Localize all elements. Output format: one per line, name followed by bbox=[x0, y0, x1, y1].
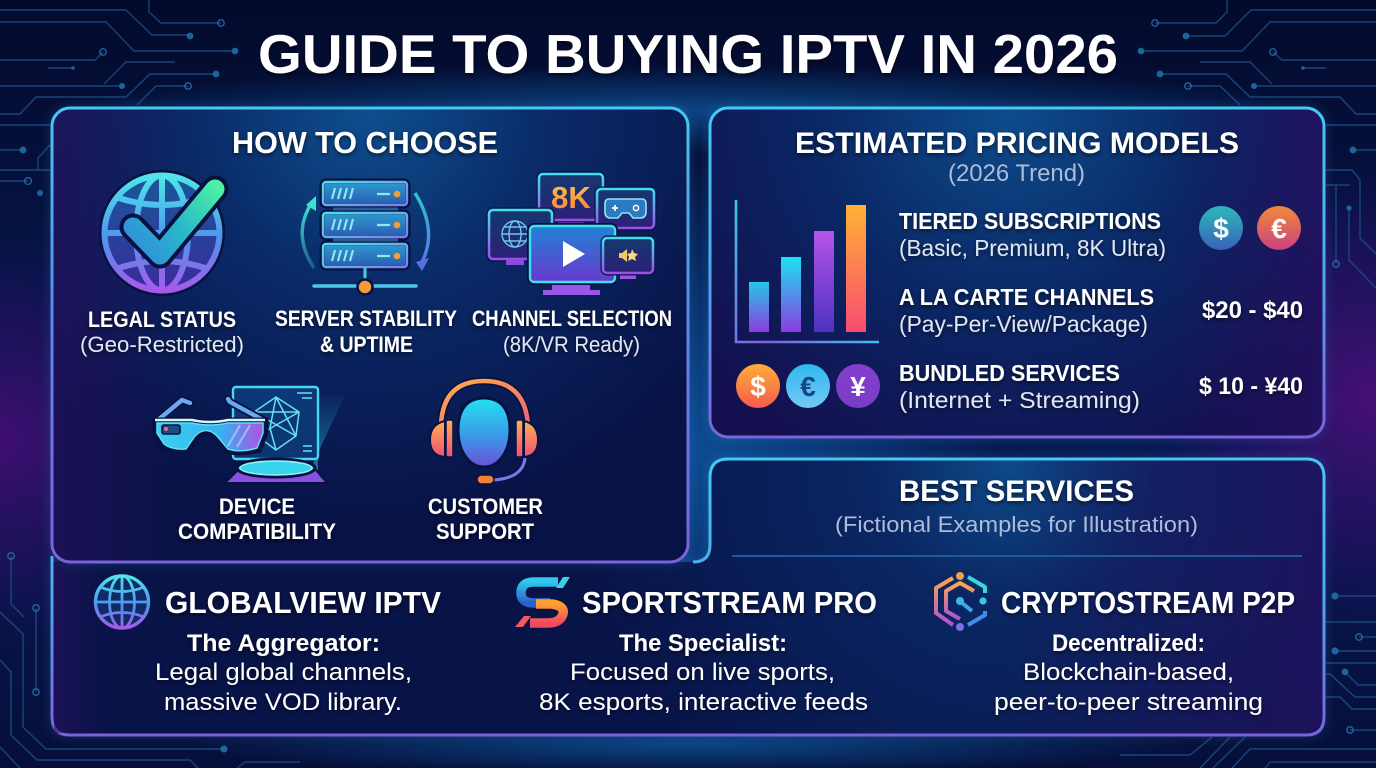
label: SERVER STABILITY bbox=[275, 306, 457, 331]
item: channel selection bbox=[472, 174, 672, 357]
bundled services row bbox=[736, 360, 1303, 413]
icon: cluster of screens: 8K bbox=[551, 180, 591, 215]
a la carte row bbox=[899, 284, 1303, 337]
icon: globe logo bbox=[96, 576, 148, 628]
label: (Geo-Restricted) bbox=[80, 332, 244, 357]
icon: cluster of screens bbox=[489, 174, 654, 295]
pricing frame bbox=[710, 108, 1324, 437]
price: $20 - $40 bbox=[1202, 297, 1303, 324]
divider bbox=[732, 555, 1302, 557]
label: DEVICE bbox=[219, 494, 295, 519]
service description: 8K esports, interactive feeds bbox=[539, 689, 868, 716]
row text: TIERED SUBSCRIPTIONS bbox=[899, 208, 1161, 234]
tiered subscriptions row bbox=[899, 206, 1301, 261]
icon: euro coin bbox=[1257, 206, 1301, 250]
item: customer support bbox=[428, 381, 543, 544]
icon: S logo bbox=[515, 577, 570, 627]
label: CHANNEL SELECTION bbox=[472, 306, 672, 331]
service: globalview iptv bbox=[96, 576, 441, 716]
service description bbox=[994, 630, 1263, 716]
row text: (Pay-Per-View/Package) bbox=[899, 311, 1148, 337]
how to choose heading: HOW TO CHOOSE bbox=[232, 125, 498, 160]
label: & UPTIME bbox=[320, 332, 413, 357]
row text: A LA CARTE CHANNELS bbox=[899, 284, 1154, 310]
best services subheading: (Fictional Examples for Illustration) bbox=[835, 512, 1198, 537]
panel: best services bbox=[52, 459, 1324, 735]
service: sportstream pro bbox=[515, 577, 877, 716]
row text: (Internet + Streaming) bbox=[899, 387, 1140, 413]
item: server stability bbox=[275, 181, 457, 357]
service description: Focused on live sports, bbox=[570, 659, 835, 686]
label: CUSTOMER bbox=[428, 494, 543, 519]
label bbox=[178, 494, 336, 544]
icon: globe with check mark bbox=[102, 173, 222, 293]
service description: Legal global channels, bbox=[155, 659, 412, 686]
service: cryptostream p2p bbox=[936, 572, 1295, 716]
service name: GLOBALVIEW IPTV bbox=[165, 585, 441, 620]
icon: euro coin: € bbox=[1271, 213, 1287, 244]
panel: how to choose bbox=[52, 108, 693, 562]
icon: yen coin bbox=[836, 364, 880, 408]
service description bbox=[155, 630, 412, 716]
label bbox=[472, 306, 672, 357]
how to choose frame bbox=[52, 108, 693, 562]
service description: The Aggregator: bbox=[187, 630, 380, 657]
label bbox=[80, 307, 244, 357]
icon: euro coin bbox=[786, 364, 830, 408]
icon: dollar coin bbox=[1199, 206, 1243, 250]
icon: dollar coin: $ bbox=[1213, 213, 1229, 244]
service description bbox=[539, 630, 868, 716]
icon: dollar coin bbox=[736, 364, 780, 408]
bar chart bbox=[736, 200, 879, 342]
label: LEGAL STATUS bbox=[88, 307, 236, 332]
label bbox=[428, 494, 543, 544]
label: COMPATIBILITY bbox=[178, 519, 336, 544]
row text: (Basic, Premium, 8K Ultra) bbox=[899, 235, 1166, 261]
icon: server rack with cycle arrows bbox=[302, 181, 429, 294]
service name: SPORTSTREAM PRO bbox=[582, 585, 877, 620]
panel: estimated pricing models bbox=[710, 108, 1324, 437]
label: (8K/VR Ready) bbox=[503, 332, 640, 357]
icon: yen coin: ¥ bbox=[850, 371, 866, 402]
service description: Decentralized: bbox=[1052, 630, 1205, 657]
row text: BUNDLED SERVICES bbox=[899, 360, 1120, 386]
row text bbox=[899, 284, 1154, 337]
item: legal status bbox=[80, 173, 244, 357]
pricing subheading: (2026 Trend) bbox=[948, 160, 1085, 187]
service description: Blockchain-based, bbox=[1023, 659, 1234, 686]
service description: massive VOD library. bbox=[164, 689, 402, 716]
icon: headset bbox=[430, 381, 538, 484]
service description: The Specialist: bbox=[619, 630, 787, 657]
label bbox=[275, 306, 457, 357]
row text bbox=[899, 208, 1166, 261]
pricing heading: ESTIMATED PRICING MODELS bbox=[795, 127, 1239, 160]
title: GUIDE TO BUYING IPTV IN 2026 bbox=[258, 23, 1118, 85]
icon: smart glasses with hologram bbox=[153, 387, 345, 483]
item: device compatibility bbox=[153, 387, 345, 544]
price: $ 10 - ¥40 bbox=[1199, 373, 1303, 400]
label: SUPPORT bbox=[436, 519, 535, 544]
icon: hexagon chain logo bbox=[936, 572, 987, 631]
service name: CRYPTOSTREAM P2P bbox=[1001, 585, 1295, 620]
icon: euro coin: € bbox=[800, 371, 816, 402]
best services heading: BEST SERVICES bbox=[899, 475, 1134, 508]
row text bbox=[899, 360, 1140, 413]
icon: dollar coin: $ bbox=[750, 371, 766, 402]
best services frame bbox=[52, 459, 1324, 735]
service description: peer-to-peer streaming bbox=[994, 689, 1263, 716]
